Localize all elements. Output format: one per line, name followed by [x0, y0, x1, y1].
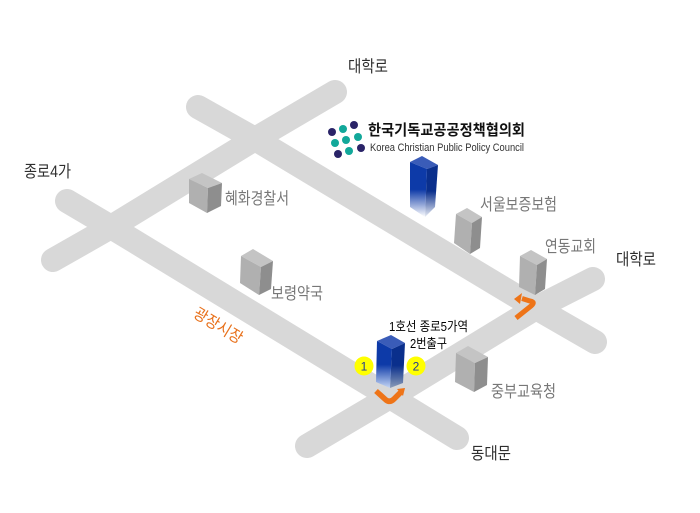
exit marker 1: 1: [361, 360, 368, 374]
building: blue tower at logo: [410, 156, 438, 217]
label: 동대문: 동대문: [471, 444, 511, 463]
label: subway exit: 1호선 종로5가역: [389, 319, 468, 334]
label: 혜화경찰서: 혜화경찰서: [225, 189, 289, 208]
exit marker 2: [406, 356, 426, 376]
label: 보령약국: 보령약국: [271, 284, 323, 303]
label: 광장시장: 광장시장: [190, 304, 246, 348]
building: 서울보증보험: [454, 208, 482, 254]
roads: [53, 92, 595, 446]
label: 중부교육청: 중부교육청: [491, 382, 556, 401]
arrow: lower route: [376, 388, 405, 401]
building: blue subway exit: [376, 335, 405, 388]
logo Korean name: 한국기독교공공정책협의회: [368, 122, 525, 139]
arrow: upper route: [514, 293, 533, 318]
logo dots: [328, 121, 365, 158]
building: 보령약국: [240, 249, 273, 295]
exit marker 1: [354, 356, 374, 376]
building: 중부교육청: [455, 346, 488, 392]
logo: [328, 121, 525, 158]
label: 연동교회: 연동교회: [545, 237, 596, 256]
label: 종로4가: 종로4가: [24, 162, 71, 181]
building: 연동교회: [519, 250, 547, 295]
building: 혜화경찰서: [189, 173, 222, 213]
label: 서울보증보험: 서울보증보험: [480, 195, 557, 214]
label: 대학로 east: 대학로: [616, 250, 656, 269]
label: subway exit: 2번출구: [410, 336, 447, 351]
logo English name: Korea Christian Public Policy Council: [370, 142, 524, 154]
label: 대학로 north: 대학로: [348, 57, 388, 76]
label: subway exit: [389, 319, 468, 351]
exit marker 2: 2: [413, 360, 420, 374]
